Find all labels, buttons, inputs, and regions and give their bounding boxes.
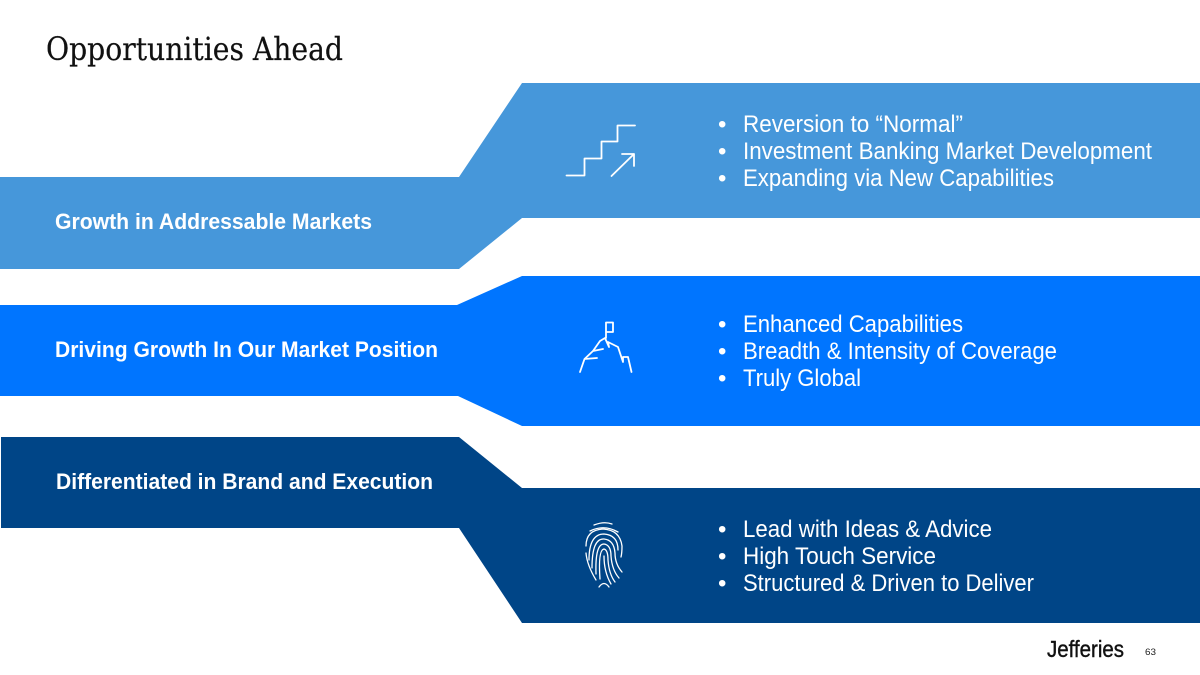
title: Opportunities Ahead xyxy=(46,32,343,68)
bullet list: market position: • xyxy=(718,311,726,338)
bullet list: growth: Expanding via New Capabilities xyxy=(743,165,1054,192)
bullet list: growth: Reversion to “Normal” xyxy=(743,111,963,138)
bullet list: brand and execution: • xyxy=(718,543,726,570)
bullet list: market position: Breadth & Intensity of Coverage xyxy=(743,338,1057,365)
heading: differentiated: Differentiated in Brand and Execution xyxy=(56,469,433,494)
band: light blue arrow shape xyxy=(0,83,1200,269)
bullet list: market position: Enhanced Capabilities xyxy=(743,311,963,338)
icon: stairs with arrow xyxy=(566,126,635,176)
bullet list: brand and execution: • xyxy=(718,516,726,543)
bullet list: market position: • xyxy=(718,365,726,392)
band: bright blue arrow shape xyxy=(0,276,1200,426)
panel: differentiated in brand and execution xyxy=(1,437,1200,623)
bullet list: growth: • xyxy=(718,111,726,138)
bullet list: brand and execution: Lead with Ideas & Advice xyxy=(743,516,992,543)
panel: growth in addressable markets xyxy=(0,83,1200,269)
bullet list: brand and execution xyxy=(718,516,1034,597)
bullet list: growth xyxy=(718,111,1152,192)
bullet list: brand and execution: High Touch Service xyxy=(743,543,936,570)
bullet list: market position: • xyxy=(718,338,726,365)
logo: Jefferies: Jefferies xyxy=(1047,636,1124,662)
bullet list: market position: Truly Global xyxy=(743,365,861,392)
bullet list: growth: • xyxy=(718,138,726,165)
bullet list: brand and execution: Structured & Driven to Deliver xyxy=(743,570,1034,597)
heading: driving growth: Driving Growth In Our Market Position xyxy=(55,337,438,362)
icon: mountain with flag xyxy=(580,322,632,372)
heading: growth: Growth in Addressable Markets xyxy=(55,209,372,234)
bullet list: brand and execution: • xyxy=(718,570,726,597)
bullet list: market position xyxy=(718,311,1057,392)
bullet list: growth: Investment Banking Market Development xyxy=(743,138,1152,165)
panel: driving growth in market position xyxy=(0,276,1200,426)
bullet list: growth: • xyxy=(718,165,726,192)
band: navy arrow shape xyxy=(1,437,1200,623)
page number: 63 xyxy=(1145,647,1156,658)
icon: fingerprint xyxy=(586,523,622,587)
